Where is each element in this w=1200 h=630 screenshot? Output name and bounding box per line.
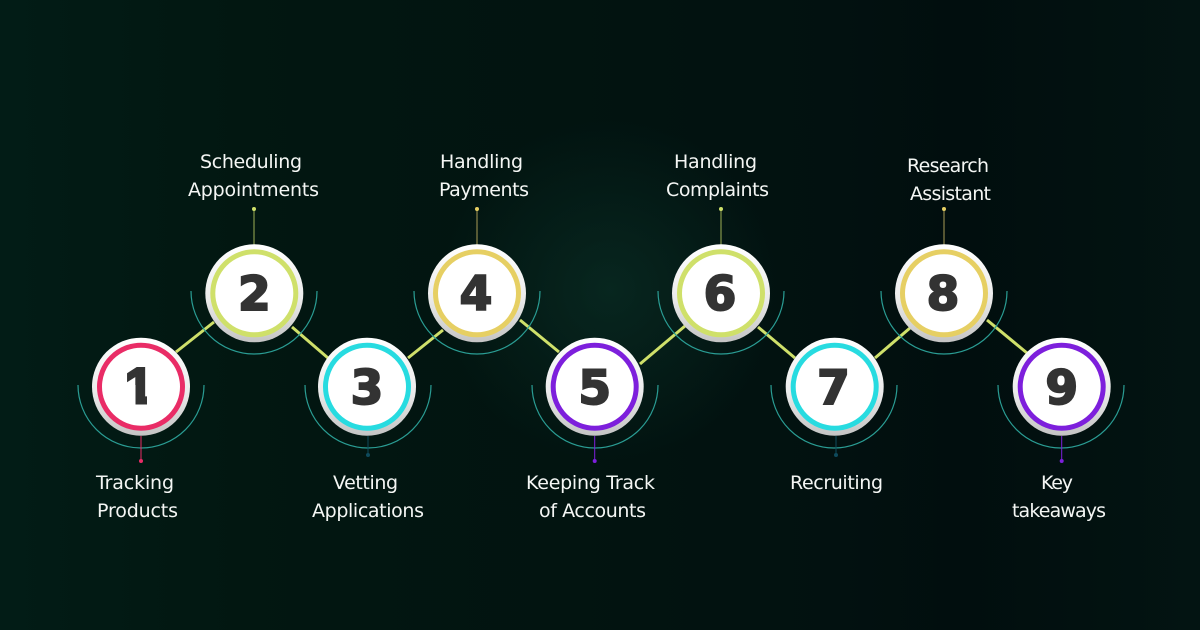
- step 3: Vetting Applications: Applications: [312, 500, 424, 522]
- step 4: Handling Payments: [414, 151, 540, 354]
- step 9: Key takeaways: 9: [1045, 361, 1078, 416]
- step 3: Vetting Applications: Vetting: [333, 472, 398, 494]
- step 8: Research Assistant: 8: [927, 267, 959, 322]
- step 1: Tracking Products: [78, 338, 204, 522]
- connector path: [176, 320, 1027, 364]
- step 7: Recruiting: Recruiting: [790, 472, 883, 494]
- step 2: Scheduling Appointments: Scheduling: [200, 151, 302, 173]
- step 4: Handling Payments: 4: [460, 267, 492, 322]
- step 9: Key takeaways: [998, 338, 1124, 522]
- step 2: Scheduling Appointments: 2: [238, 267, 271, 322]
- step 6: Handling Complaints: Handling: [674, 151, 757, 173]
- step 8: Research Assistant: [881, 155, 1007, 354]
- step 1: Tracking Products: Tracking: [95, 472, 174, 494]
- step 5: Keeping Track of Accounts: 5: [578, 361, 611, 416]
- step 6: Handling Complaints: [658, 151, 784, 354]
- step 5: Keeping Track of Accounts: of Accounts: [539, 500, 646, 522]
- step 3: Vetting Applications: [305, 338, 431, 522]
- step 2: Scheduling Appointments: [188, 151, 319, 354]
- step 1: Tracking Products: Products: [97, 500, 178, 522]
- step 5: Keeping Track of Accounts: Keeping Track: [526, 472, 655, 494]
- step 1: Tracking Products: 1: [125, 358, 153, 414]
- step 8: Research Assistant: Assistant: [910, 183, 991, 205]
- step 8: Research Assistant: Research: [907, 155, 989, 177]
- step 9: Key takeaways: takeaways: [1012, 500, 1106, 522]
- step 4: Handling Payments: Handling: [440, 151, 523, 173]
- step 9: Key takeaways: Key: [1041, 472, 1073, 494]
- step 5: Keeping Track of Accounts: [526, 338, 658, 522]
- step 6: Handling Complaints: Complaints: [666, 179, 769, 201]
- step 7: Recruiting: [771, 338, 897, 494]
- step 6: Handling Complaints: 6: [704, 267, 736, 322]
- step 3: Vetting Applications: 3: [351, 361, 383, 416]
- step 4: Handling Payments: Payments: [439, 179, 529, 201]
- step 2: Scheduling Appointments: Appointments: [188, 179, 319, 201]
- step 7: Recruiting: 7: [817, 361, 850, 416]
